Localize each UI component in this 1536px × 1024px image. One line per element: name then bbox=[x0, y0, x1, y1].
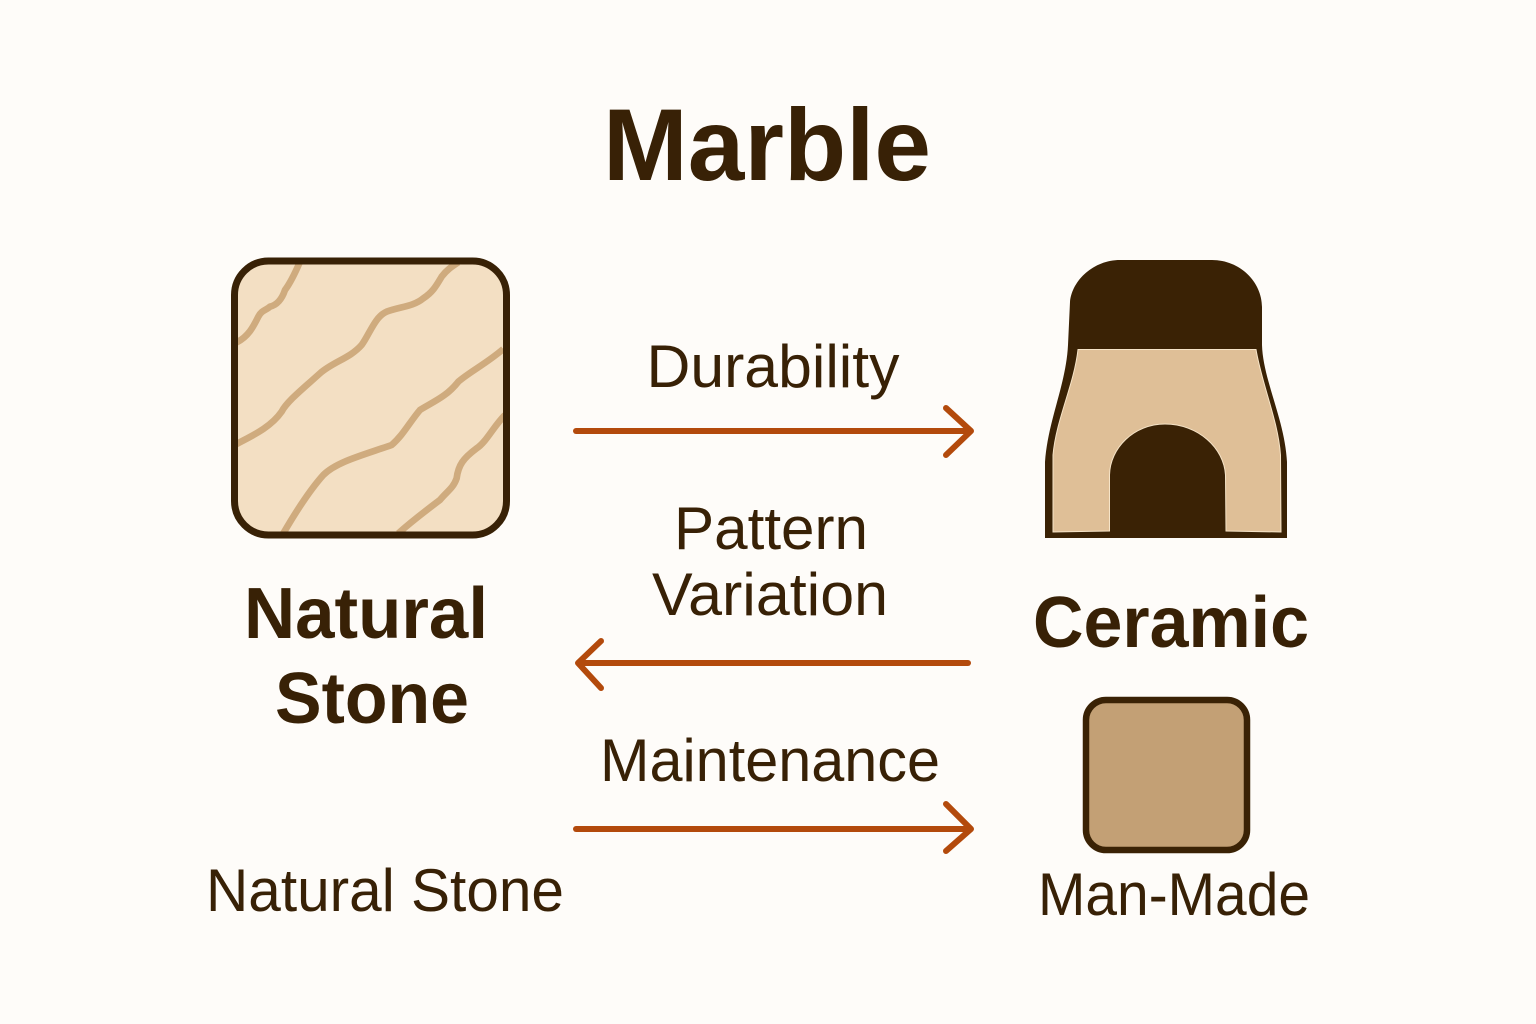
label: Pattern Variation: Pattern bbox=[674, 495, 868, 562]
caption: Natural Stone: Natural Stone bbox=[206, 857, 564, 924]
title: Marble bbox=[603, 88, 931, 202]
heading: Natural Stone bbox=[244, 574, 488, 739]
heading: Natural Stone: Natural bbox=[244, 574, 488, 654]
icon: natural stone tile with veins bbox=[234, 261, 506, 535]
caption: Man-Made: Man-Made bbox=[1038, 861, 1310, 928]
label: Maintenance: Maintenance bbox=[600, 727, 940, 794]
arrow: right, maintenance bbox=[576, 804, 971, 851]
heading: Ceramic: Ceramic bbox=[1033, 583, 1309, 663]
label: Pattern Variation bbox=[652, 495, 888, 628]
arrow: left, pattern variation bbox=[578, 641, 968, 688]
label: Pattern Variation: Variation bbox=[652, 561, 888, 628]
label: Durability: Durability bbox=[646, 333, 900, 400]
icon: man-made tile bbox=[1086, 700, 1247, 850]
arrow: right, durability bbox=[576, 408, 971, 455]
icon: ceramic kiln bbox=[1045, 260, 1287, 538]
heading: Natural Stone: Stone bbox=[275, 659, 469, 739]
